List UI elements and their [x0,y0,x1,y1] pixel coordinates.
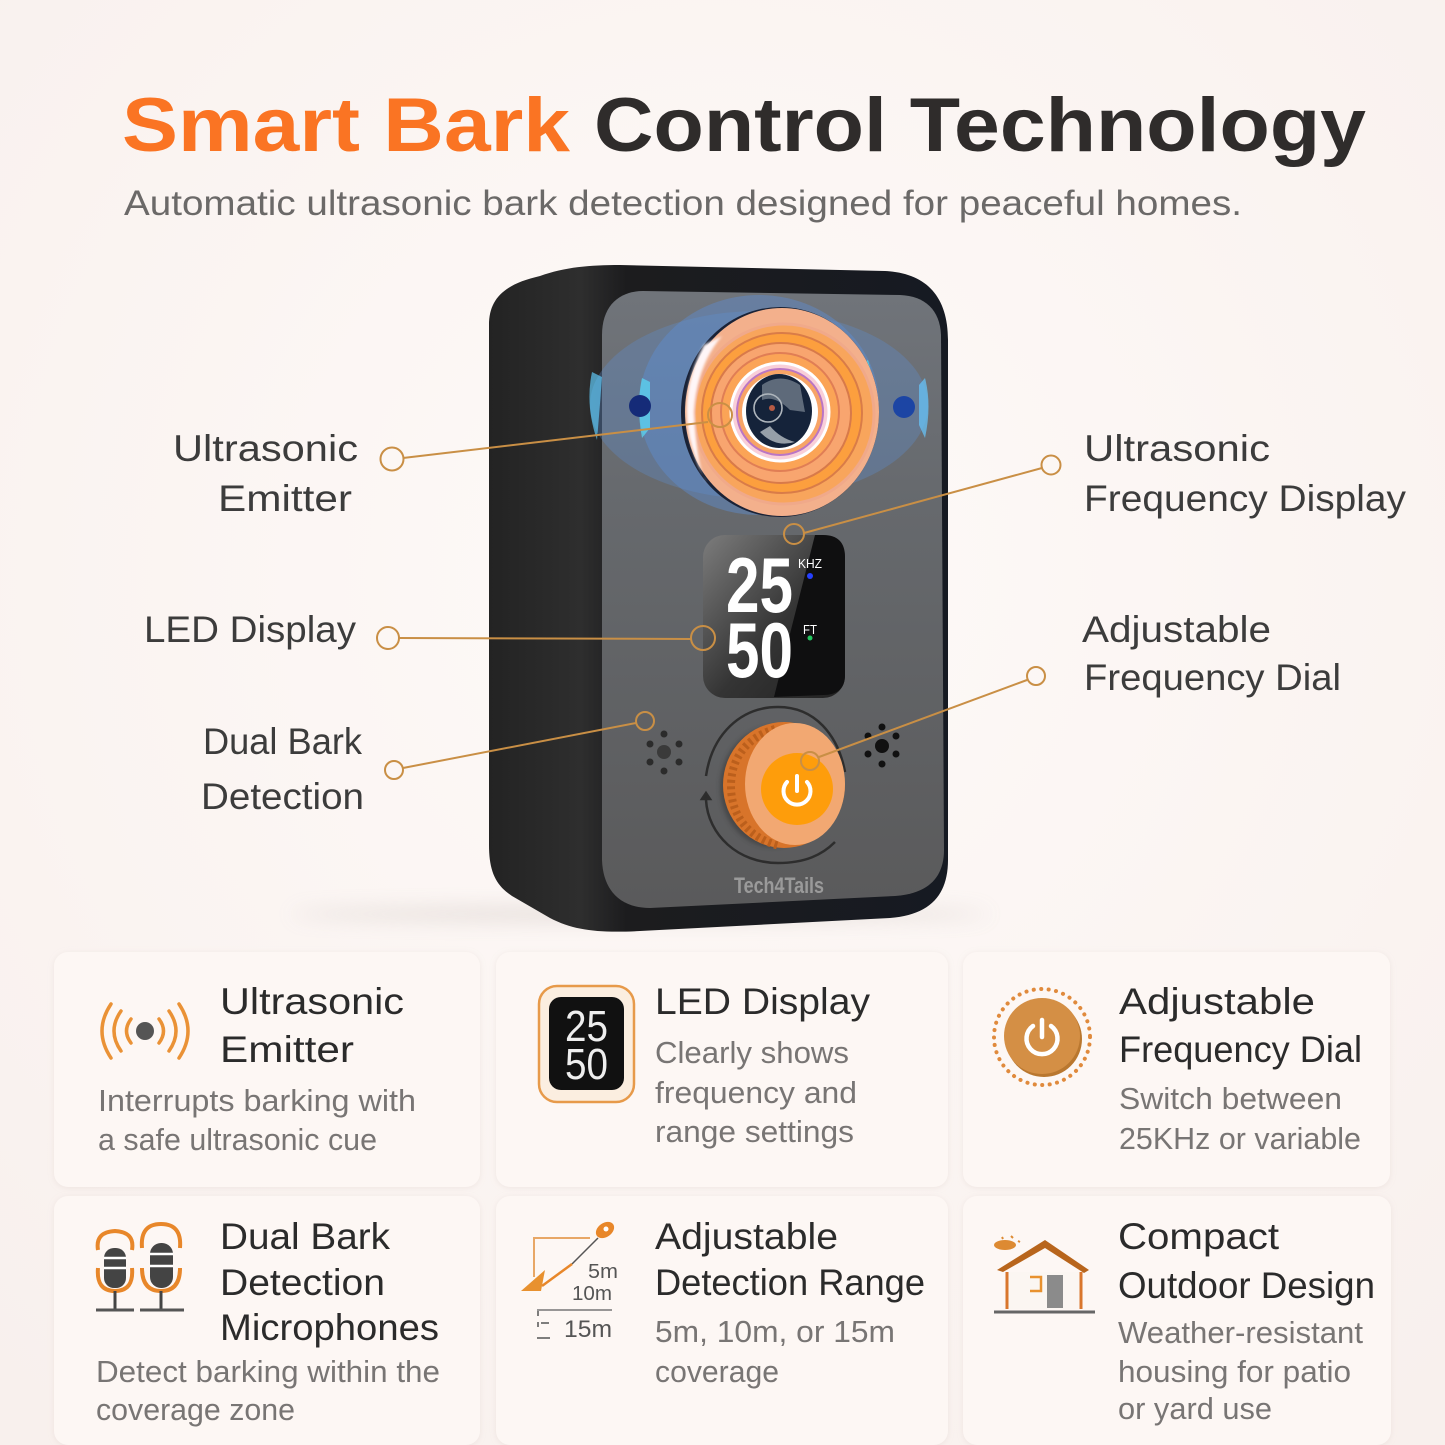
heading [1119,981,1362,1070]
label: Adjustable Frequency Dial: Adjustable [1082,609,1271,650]
ground shadow [290,908,990,920]
icon: range arrow: 10m [572,1283,612,1305]
screw right [893,396,915,418]
label: Ultrasonic Frequency Display: Frequency Display [1084,478,1407,519]
label: Adjustable Frequency Dial [1082,609,1341,698]
title: Control Technology [594,83,1366,168]
device [290,265,990,932]
label: Dual Bark Detection: Dual Bark [203,721,362,762]
LED display screen: KHZ [798,556,822,571]
icon: house [994,1236,1095,1312]
label: Ultrasonic Emitter [173,428,358,519]
heading: Dual Bark [220,1216,391,1257]
description: coverage zone [96,1392,295,1427]
icon: microphones [96,1224,184,1310]
label: Dual Bark Detection: Detection [201,776,364,817]
icon: power dial [994,989,1090,1085]
panel: LED display [496,952,948,1187]
blue sonic halo [589,295,928,515]
callout: frequency dial [801,667,1045,770]
device shell [489,265,948,932]
speaker right [864,724,900,768]
title [122,83,1366,168]
heading: Adjustable [655,1216,838,1257]
heading [220,981,404,1070]
heading: Detection Range [655,1262,925,1303]
callout: bark detection [385,712,654,779]
label: Adjustable Frequency Dial: Frequency Dial [1084,657,1341,698]
label: LED Display: LED Display [144,609,357,650]
screw left [629,395,651,417]
heading [220,1216,439,1348]
icon: sound waves [102,1004,188,1058]
heading: Microphones [220,1307,439,1348]
panel: outdoor design [963,1196,1391,1445]
callout: frequency display [784,456,1060,544]
label: Dual Bark Detection [201,721,364,817]
description [96,1354,440,1427]
panel: frequency dial [963,952,1390,1187]
description: 25KHz or variable [1119,1121,1361,1156]
description: housing for patio [1118,1354,1351,1389]
frequency dial [720,722,845,848]
icon: LED screen: 50 [565,1040,608,1089]
panel: detection range [496,1196,948,1445]
icon: LED screen: 25 [565,1002,608,1051]
description: Interrupts barking with [98,1083,416,1118]
callout: LED display [377,626,715,650]
heading: Adjustable [1119,981,1315,1022]
heading: LED Display [655,981,871,1022]
LED display screen: 50 [726,606,793,694]
label: Ultrasonic Frequency Display: Ultrasonic [1084,428,1270,469]
description: Switch between [1119,1081,1342,1116]
description [1118,1315,1363,1426]
heading: Outdoor Design [1118,1265,1375,1306]
brand name: Tech4Tails [734,873,824,898]
panel: dual microphones [54,1196,480,1445]
heading: Compact [1118,1216,1280,1257]
description [655,1314,895,1389]
LED display screen [703,535,845,698]
label: Ultrasonic Emitter: Emitter [218,478,352,519]
LED display screen: 25 [726,541,793,629]
callout: ultrasonic emitter [380,403,732,470]
description: or yard use [1118,1391,1272,1426]
label: Ultrasonic Frequency Display [1084,428,1407,519]
rotation ring [702,707,845,863]
description: Clearly shows [655,1035,849,1070]
icon: range arrow [521,1219,618,1343]
heading: Detection [220,1262,385,1303]
icon: range arrow: 15m [564,1316,612,1343]
description: 5m, 10m, or 15m [655,1314,895,1349]
description [1119,1081,1361,1156]
label: Ultrasonic Emitter: Ultrasonic [173,428,358,469]
device front face [602,291,944,908]
description: Detect barking within the [96,1354,440,1389]
description: frequency and [655,1075,857,1110]
lens [746,374,812,448]
LED display screen: FT [803,622,817,637]
heading: Emitter [220,1029,354,1070]
heading [1118,1216,1375,1306]
heading [655,1216,925,1303]
heading: Ultrasonic [220,981,404,1022]
description: coverage [655,1354,779,1389]
heading: Frequency Dial [1119,1029,1362,1070]
description: Weather-resistant [1118,1315,1363,1350]
speaker left [646,730,682,774]
icon: range arrow: 5m [588,1261,618,1283]
panel: ultrasonic emitter [54,952,480,1187]
description: a safe ultrasonic cue [98,1122,377,1157]
ultrasonic emitter rings [681,307,879,517]
description [655,1035,857,1149]
description [98,1083,416,1157]
icon: LED screen [539,986,634,1102]
title: Smart Bark [122,83,571,168]
description: range settings [655,1114,854,1149]
subtitle: Automatic ultrasonic bark detection designed for peaceful homes. [124,184,1242,223]
